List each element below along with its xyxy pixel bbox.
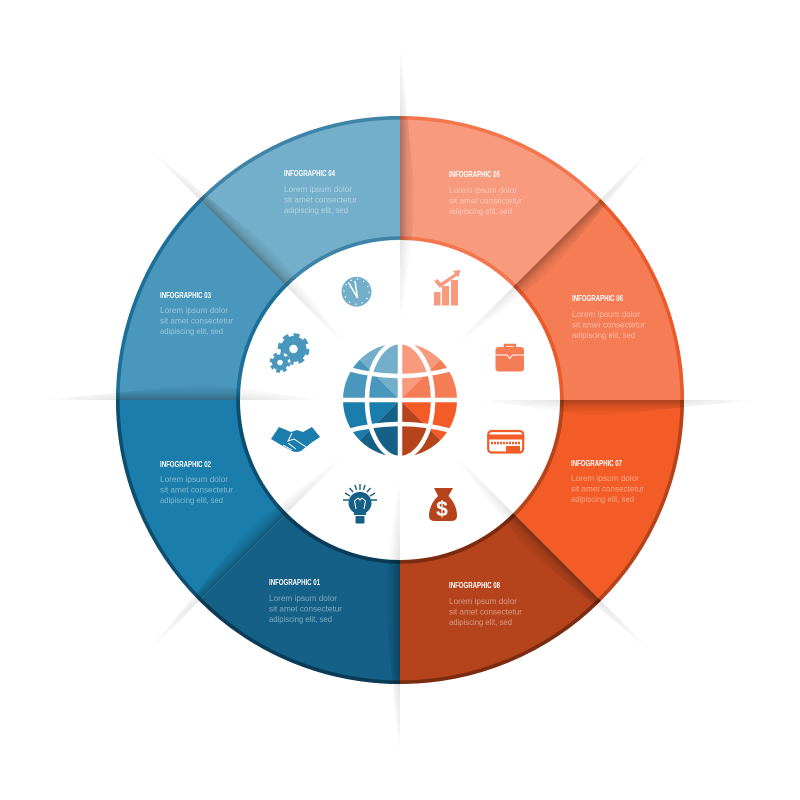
panel: infographic 08: [338, 480, 601, 743]
panel: infographic 05: INFOGRAPHIC 05: [449, 169, 500, 179]
panel: infographic 03: Lorem ipsum dolor: [160, 305, 228, 315]
panel: infographic 01: adipiscing elit, sed: [269, 614, 332, 624]
panel: infographic 06: INFOGRAPHIC 06: [572, 293, 623, 303]
icon: briefcase: [496, 345, 524, 372]
panel: infographic 06: [480, 199, 743, 462]
panel: infographic 04: adipiscing elit, sed: [284, 205, 348, 215]
panel: infographic 02: adipiscing elit, sed: [160, 495, 223, 505]
panel: infographic 08: INFOGRAPHIC 08: [449, 580, 500, 590]
panel: infographic 02: sit amet consectetur: [160, 484, 233, 494]
panel: infographic 07: [513, 400, 684, 601]
icon: handshake: [271, 427, 320, 452]
panel: infographic 08: sit amet consectetur: [449, 606, 522, 616]
icon: clock: [342, 277, 372, 307]
fold shadows: [66, 66, 734, 734]
panel: infographic 07: Lorem ipsum dolor: [571, 473, 639, 483]
panel: infographic 05: adipiscing elit, sed: [449, 206, 512, 216]
panel: infographic 01: [199, 513, 400, 684]
panel: infographic 05: [400, 116, 601, 287]
panel: infographic 01: Lorem ipsum dolor: [269, 593, 337, 603]
icon: growth chart: [434, 270, 460, 306]
panel: infographic 06: sit amet consectetur: [572, 320, 645, 330]
panel: infographic 03: [116, 199, 287, 400]
panel: infographic 04: sit amet consectetur: [284, 194, 357, 204]
panel: infographic 03: sit amet consectetur: [160, 316, 233, 326]
panel: infographic 06: adipiscing elit, sed: [572, 330, 635, 340]
icon: central globe: [331, 331, 469, 469]
panel: infographic 05: sit amet consectetur: [449, 196, 522, 206]
panel: infographic 08: Lorem ipsum dolor: [449, 596, 517, 606]
panel: infographic 03: INFOGRAPHIC 03: [160, 290, 211, 300]
panel: infographic 07: adipiscing elit, sed: [571, 494, 634, 504]
panel: infographic 07: INFOGRAPHIC 07: [571, 458, 622, 468]
panel: infographic 05: Lorem ipsum dolor: [449, 185, 517, 195]
panel: infographic 06: Lorem ipsum dolor: [572, 309, 640, 319]
panel: infographic 02: Lorem ipsum dolor: [160, 474, 228, 484]
panel: infographic 02: [57, 338, 320, 601]
icon: light bulb: [343, 484, 377, 524]
icon: money bag: [429, 488, 457, 521]
icon: credit card: [488, 431, 523, 452]
panel: infographic 01: INFOGRAPHIC 01: [269, 577, 320, 587]
panel: infographic 04: INFOGRAPHIC 04: [284, 168, 335, 178]
icon: gears: [270, 335, 308, 373]
panel: infographic 01: sit amet consectetur: [269, 604, 342, 614]
panel: infographic 03: adipiscing elit, sed: [160, 326, 223, 336]
panel: infographic 07: sit amet consectetur: [571, 484, 644, 494]
panel: infographic 04: Lorem ipsum dolor: [284, 184, 352, 194]
icon: money bag: $: [436, 498, 448, 521]
panel: infographic 02: INFOGRAPHIC 02: [160, 459, 211, 469]
panel: infographic 04: [199, 57, 462, 320]
panel: infographic 08: adipiscing elit, sed: [449, 617, 512, 627]
